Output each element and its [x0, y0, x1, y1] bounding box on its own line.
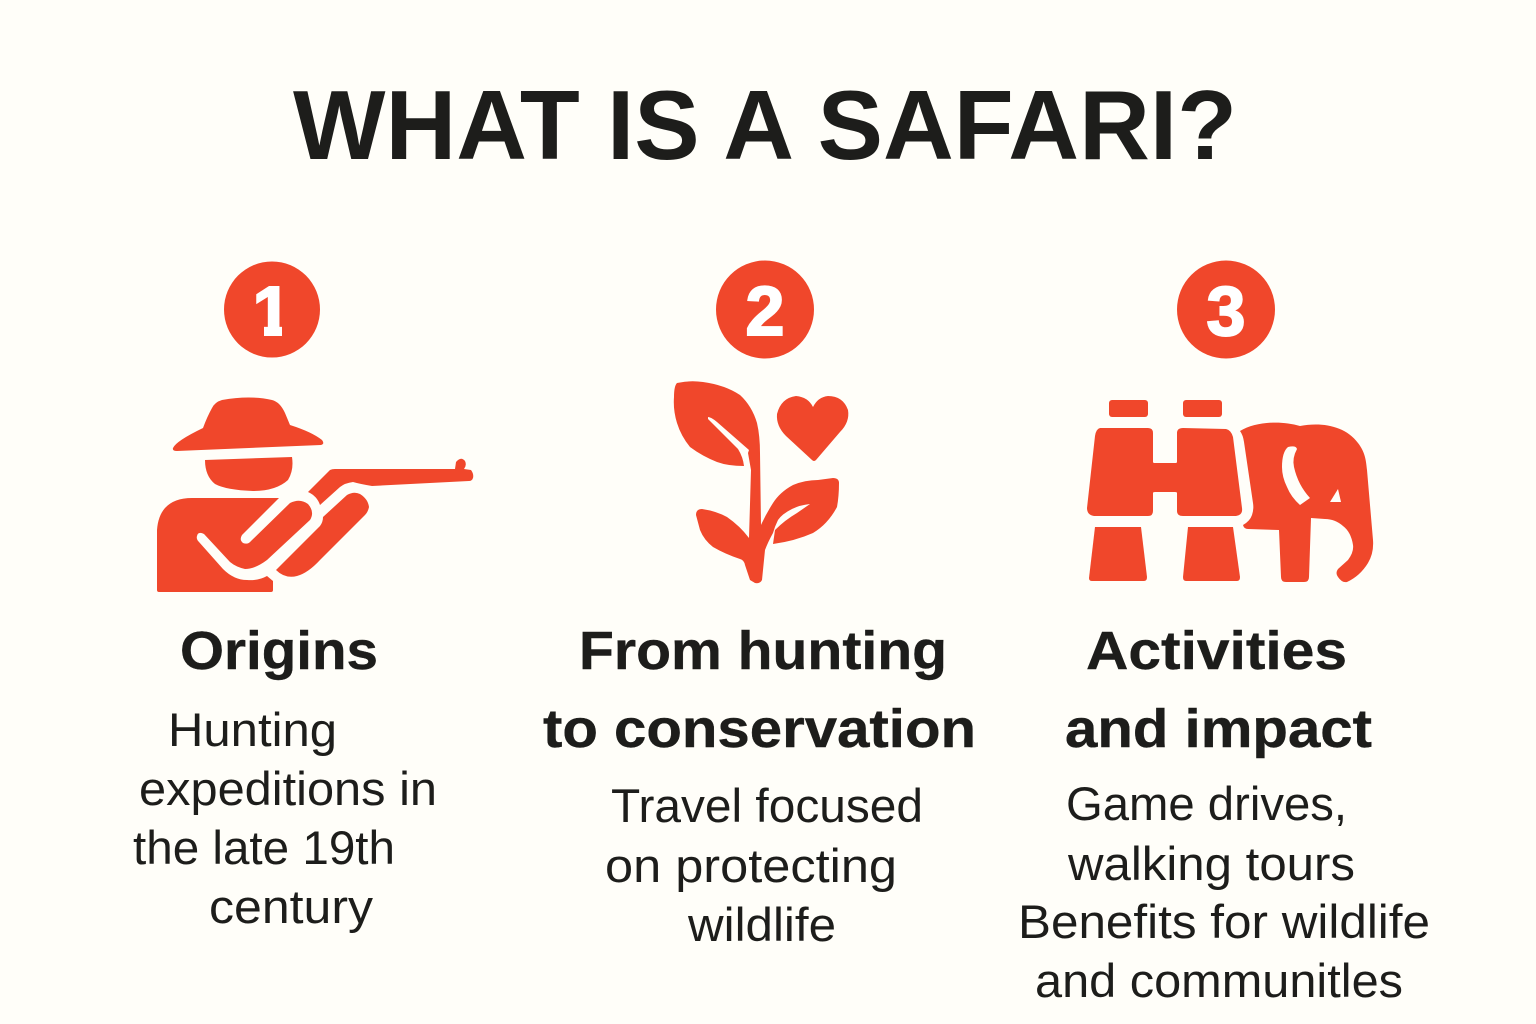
panel: origins [133, 262, 473, 933]
panel: activities and impact [1018, 260, 1430, 1007]
text: activities description [1018, 777, 1430, 1007]
number badge 1: 1 [253, 272, 291, 350]
text: activities description: walking tours [1067, 837, 1355, 890]
text: activities description: Benefits for wildlife [1018, 895, 1430, 948]
text: origins description: century [209, 880, 374, 933]
heading: from hunting to conservation: to conservation [543, 699, 976, 759]
text: origins description: the late 19th [133, 821, 395, 874]
number badge 2: 2 [746, 272, 784, 350]
heading: origins: Origins [180, 621, 378, 681]
title: WHAT IS A SAFARI? [293, 70, 1237, 180]
number badge 1 [224, 262, 320, 358]
text: conservation description: Travel focused [611, 779, 923, 832]
number badge 3 [1177, 260, 1275, 358]
number badge 2 [716, 260, 814, 358]
text: activities description: and communitles [1035, 954, 1403, 1007]
icon: plant and heart [674, 381, 848, 583]
panel: from hunting to conservation [543, 260, 976, 951]
number badge 3: 3 [1207, 272, 1245, 350]
icon: hunter with rifle [157, 398, 473, 592]
text: conservation description: wildlife [687, 898, 836, 951]
text: activities description: Game drives, [1066, 777, 1347, 830]
heading: from hunting to conservation: From hunting [579, 621, 947, 681]
text: conservation description [605, 779, 923, 951]
icon: binoculars [1087, 400, 1242, 581]
text: conservation description: on protecting [605, 839, 897, 892]
text: origins description: Hunting [168, 703, 337, 756]
heading: activities and impact: Activities [1086, 621, 1347, 681]
heading: activities and impact [1065, 621, 1372, 759]
heading: from hunting to conservation [543, 621, 976, 759]
heading: activities and impact: and impact [1065, 699, 1372, 759]
text: origins description [133, 703, 437, 933]
text: origins description: expeditions in [139, 762, 437, 815]
icon: elephant [1240, 423, 1373, 582]
